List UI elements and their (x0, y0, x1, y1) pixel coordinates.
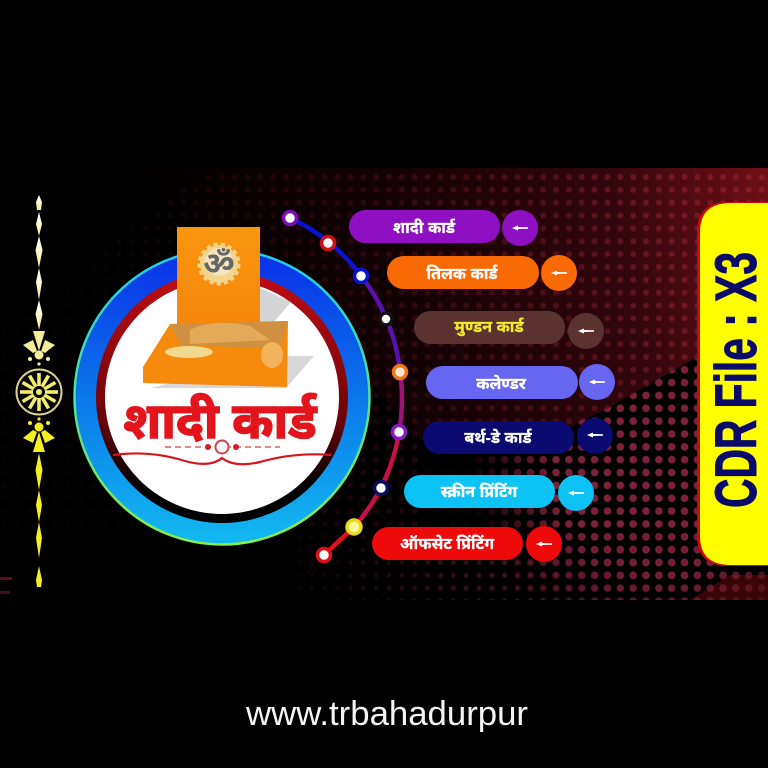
side panel: CDR file (697, 202, 768, 566)
card stack (143, 321, 288, 387)
item: birthday card: बर्थ-डे कार्ड (464, 428, 533, 447)
item: calendar: कलेण्डर (476, 374, 527, 393)
upright card (177, 227, 260, 327)
left ornament (16, 195, 62, 587)
background band (0, 168, 768, 600)
upper bead chain (36, 195, 42, 330)
lower fan (23, 417, 55, 452)
white disc (105, 280, 339, 514)
blue ring (74, 250, 370, 544)
circular badge (74, 250, 370, 544)
item: tilak card (387, 255, 577, 291)
inner dark ring (96, 271, 348, 523)
wheel (16, 370, 62, 414)
item: tilak card: तिलक कार्ड (426, 264, 499, 283)
item: screen printing: स्क्रीन प्रिंटिंग (441, 482, 518, 501)
panel label: CDR File : X3 (704, 252, 768, 508)
item: shaadi card: शादी कार्ड (393, 218, 456, 237)
item: offset printing (372, 526, 562, 562)
item: screen printing (404, 475, 594, 511)
lower bead chain (36, 453, 42, 587)
timeline arc (290, 218, 402, 555)
item: offset printing: ऑफसेट प्रिंटिंग (400, 534, 495, 553)
item: shaadi card (349, 210, 538, 246)
om emblem: ॐ (203, 246, 235, 281)
shadows (260, 288, 291, 323)
item: birthday card (423, 418, 613, 454)
upper fan (23, 331, 55, 366)
timeline nodes (284, 212, 406, 562)
product: wedding cards (143, 227, 314, 388)
title flourish (113, 440, 331, 464)
footer url: www.trbahadurpur (245, 695, 528, 733)
badge title: शादी कार्ड (124, 393, 318, 449)
item: mundan card: मुण्डन कार्ड (454, 317, 525, 337)
item: mundan card (414, 311, 604, 349)
item: calendar (426, 364, 615, 400)
